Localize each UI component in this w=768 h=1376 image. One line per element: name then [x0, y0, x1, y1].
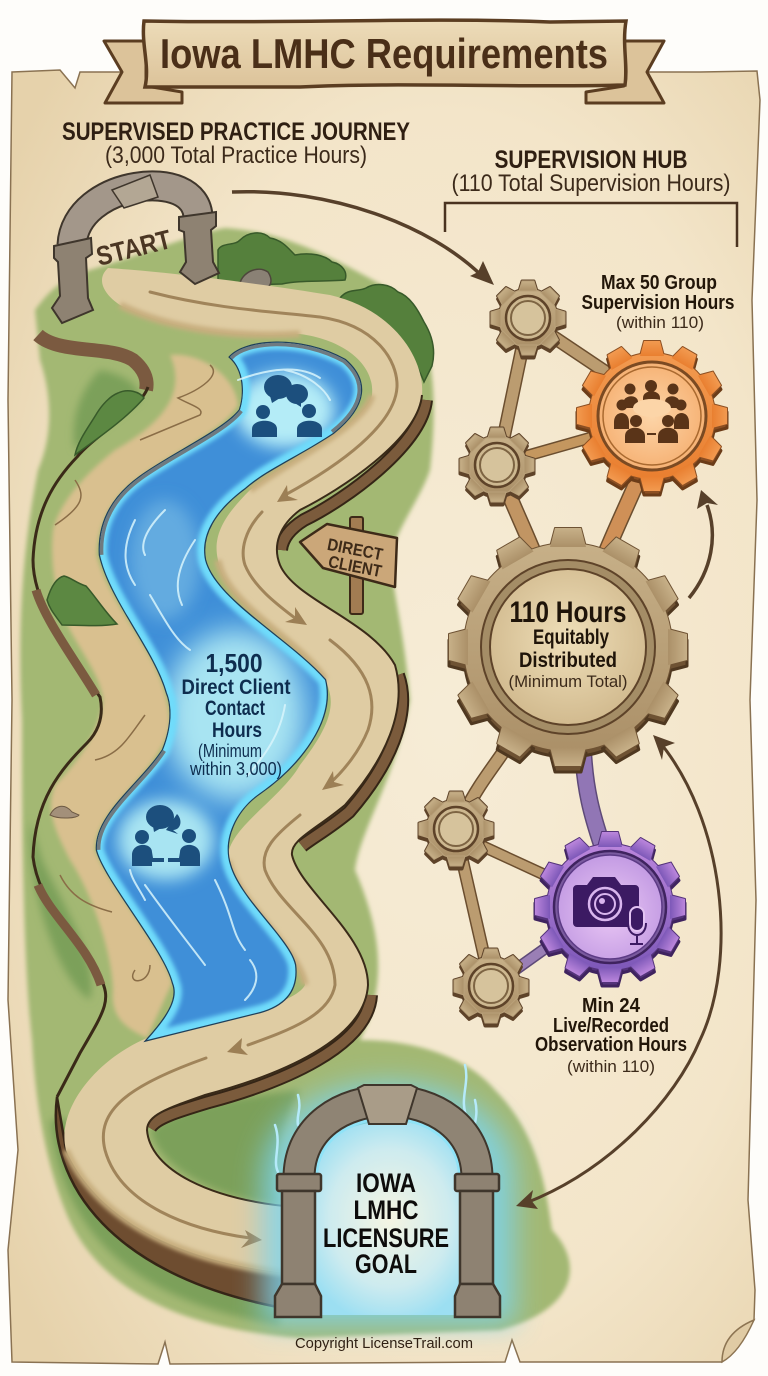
heading: supervision hub: (110 Total Supervision Hours)	[452, 170, 730, 197]
signpost: direct client	[300, 517, 397, 614]
river currents	[126, 370, 330, 1000]
goal glow	[262, 1082, 515, 1325]
copyright: Copyright LicenseTrail.com	[295, 1335, 473, 1352]
title text: Iowa LMHC Requirements	[160, 30, 608, 77]
winding road	[56, 268, 426, 1310]
goal arch	[262, 1065, 515, 1325]
gear: small top	[491, 281, 565, 358]
river	[97, 343, 361, 1040]
banner right tail	[586, 41, 664, 103]
arrow: journey to hub	[232, 192, 494, 285]
label: max 50 group: (within 110)	[616, 313, 704, 332]
lower left cliffs	[36, 590, 101, 985]
main gear text: (Minimum Total)	[508, 672, 628, 691]
banner main	[143, 20, 626, 87]
main gear text: Equitably	[533, 626, 609, 649]
map land	[20, 228, 570, 1338]
dirt cracks	[55, 365, 213, 981]
main gear text	[508, 596, 628, 691]
goal arch curve outline	[299, 1101, 477, 1178]
arrow: goal to main gear	[516, 735, 721, 1209]
sign text: CLIENT	[327, 552, 384, 581]
right bank cliff faces	[150, 400, 426, 1128]
darker green shading	[30, 370, 300, 1325]
goal right pillar	[455, 1174, 500, 1317]
main gear text: 110 Hours	[510, 596, 626, 629]
river inner shading	[97, 343, 361, 1040]
label: max 50 group	[582, 272, 734, 332]
river text: within 3,000)	[189, 759, 282, 779]
cyan edge	[97, 343, 361, 1040]
river text: 1,500	[206, 648, 262, 678]
goal wisps	[275, 1065, 476, 1172]
goal text: LMHC	[354, 1195, 418, 1225]
icon: counselling chat bottom	[132, 805, 200, 866]
heading: supervision hub	[452, 146, 730, 197]
road center lines	[103, 292, 397, 1238]
right pillar	[179, 212, 219, 284]
bush: lower left	[47, 576, 117, 626]
goal portal	[305, 1121, 475, 1315]
arrow: main gear to orange gear	[689, 490, 718, 598]
heading: supervised practice journey: (3,000 Total Practice Hours)	[105, 142, 367, 169]
light centre: text	[165, 630, 305, 800]
label: min 24 observation	[535, 995, 687, 1076]
green land	[20, 228, 570, 1338]
heading: supervised practice journey	[62, 118, 410, 169]
gear: small middle	[460, 428, 534, 505]
purple gear body	[535, 832, 685, 986]
bottom cliff	[56, 1097, 295, 1310]
label: max 50 group: Supervision Hours	[582, 292, 734, 314]
river text	[182, 648, 290, 779]
gear connectors	[460, 328, 640, 970]
rock: lower left	[50, 806, 79, 818]
gear: small lower	[419, 792, 493, 869]
light centre: bottom icon	[118, 800, 214, 880]
banner left tail	[104, 41, 182, 103]
sign text: DIRECT	[326, 535, 385, 564]
goal left pillar	[275, 1174, 321, 1317]
goal text: LICENSURE	[323, 1223, 449, 1253]
title banner	[104, 20, 664, 103]
goal keystone	[358, 1085, 417, 1124]
left pillar	[52, 238, 93, 323]
river text: Contact	[205, 697, 265, 720]
goal text	[323, 1168, 449, 1279]
sign board	[300, 524, 397, 587]
main gear body	[449, 528, 687, 772]
orange gear body	[577, 341, 727, 495]
river text: Hours	[212, 719, 262, 742]
road surface	[64, 268, 422, 1274]
gear: group supervision	[577, 341, 727, 495]
label: max 50 group: Max 50 Group	[601, 272, 717, 294]
road right edge line	[147, 395, 422, 1207]
label: min 24 observation: (within 110)	[567, 1057, 655, 1076]
road direction arrows	[227, 485, 344, 1248]
heading: supervised practice journey: SUPERVISED PRACTICE JOURNEY	[62, 118, 410, 146]
label: min 24 observation: Live/Recorded	[553, 1015, 669, 1037]
upper left cliff	[38, 335, 147, 390]
label: min 24 observation: Observation Hours	[535, 1034, 687, 1056]
right bank cliffs	[150, 400, 426, 1128]
goal arch stone	[299, 1101, 477, 1178]
goal text: IOWA	[356, 1168, 416, 1198]
icon: camera and microphone	[573, 877, 646, 944]
sign text	[326, 535, 385, 581]
tan dirt bank	[51, 355, 238, 1038]
arch stone	[72, 186, 198, 245]
label: min 24 observation: Min 24	[582, 995, 641, 1017]
start text: START	[93, 224, 175, 272]
goal text: GOAL	[355, 1249, 417, 1279]
goal arch inner glow	[316, 1118, 460, 1178]
light centre: top icon	[235, 372, 335, 448]
heading: supervision hub: SUPERVISION HUB	[494, 146, 688, 174]
sign post	[350, 517, 363, 614]
river text: (Minimum	[198, 741, 262, 761]
road shading	[66, 305, 372, 1274]
river middle	[130, 500, 200, 620]
gear: observation	[535, 832, 685, 986]
icon: counselling chat top	[252, 375, 322, 437]
icon: group meeting	[614, 380, 689, 443]
main gear text: Distributed	[519, 649, 617, 672]
rock: top	[240, 269, 271, 287]
bush: left	[75, 391, 144, 455]
start arch	[52, 175, 219, 323]
parchment corner curl	[722, 1320, 754, 1362]
bush: top	[218, 233, 346, 284]
bracket	[445, 203, 737, 247]
river base	[97, 343, 361, 1040]
gear: main hub	[449, 528, 687, 772]
stone bank	[97, 343, 361, 850]
bush: right	[340, 285, 434, 382]
gear: small bottom	[454, 949, 528, 1026]
arch keystone	[112, 175, 158, 208]
land boundary line	[33, 387, 148, 1097]
river text: Direct Client	[182, 676, 290, 699]
arch curve outline	[72, 186, 198, 245]
